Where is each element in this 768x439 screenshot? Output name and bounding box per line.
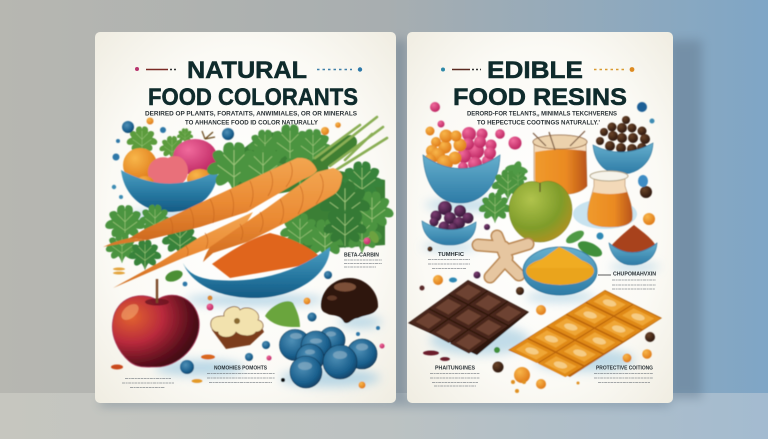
heading: natural food colorants: NATURAL: [187, 57, 307, 84]
scattered dots, right panel: [420, 102, 655, 393]
label: phaitungines: [430, 366, 480, 386]
apple slice: [211, 307, 264, 349]
subtitle: DERORD-FOR TELANTS,, MINIMALS TEKCHVERENS: [467, 110, 618, 118]
label: phaitungines: PHAITUNGINES: [435, 366, 476, 372]
label: nomohies pomohts: [207, 366, 275, 382]
label: beta-carbin: BETA-CARBIN: [344, 252, 379, 258]
title ornaments: [441, 67, 634, 72]
ginger root: [478, 236, 528, 277]
label: protective coitiong: [594, 366, 653, 382]
background floor: [0, 393, 768, 439]
title ornaments: [135, 67, 362, 72]
carrots: [103, 158, 342, 288]
subtitle: [145, 110, 358, 126]
label: nomohies pomohts: NOMOHIES POMOHTS: [214, 366, 268, 372]
dark chocolate bar: [408, 280, 529, 355]
apple: [112, 279, 199, 367]
carrot leaves: [105, 124, 394, 270]
heading: natural food colorants: [148, 57, 358, 111]
leaves around fruit bowl: [127, 126, 193, 160]
chocolate scoop: [321, 278, 378, 323]
green apple: [509, 181, 572, 242]
subtitle: TO HEPECTUCE COOTINGS NATURALLY.': [477, 120, 600, 126]
bowl of turmeric powder: [523, 247, 597, 295]
serving bowl with orange powder: [183, 233, 330, 298]
leaf near berries: [265, 301, 300, 327]
bowl of orange and pink berries: [423, 127, 500, 203]
panel shadow: [100, 40, 702, 406]
label: tumhfic: TUMHFIC: [438, 252, 464, 258]
label: beta-carbin: [344, 252, 382, 267]
leaves behind green apple: [479, 169, 527, 223]
scattered dots, left panel: [111, 118, 384, 388]
heading: edible food resins: FOOD RESINS: [453, 84, 627, 111]
fruit bowl: [121, 131, 218, 212]
heading: edible food resins: EDIBLE: [487, 57, 583, 84]
mint leaves: [504, 160, 604, 260]
bowl of red spice: [609, 225, 657, 265]
heading: natural food colorants: FOOD COLORANTS: [148, 84, 358, 111]
soft blue shadows: [130, 210, 382, 387]
caramel bar: [508, 290, 662, 377]
label: chupomahvxin with leader: CHUPOMAHVXIN: [613, 272, 656, 278]
label: tumhfic: [428, 252, 470, 268]
panel: natural food colorants: [95, 32, 396, 403]
subtitle: [467, 110, 618, 126]
heading: edible food resins: [453, 57, 627, 111]
blueberries: [280, 327, 377, 388]
plate with small jar: [573, 171, 637, 229]
panel: edible food resins: [407, 32, 673, 403]
subtitle: DERIRED OP PLANITS, FORATAITS, ANWIMIALES, OR OR MINERALS: [145, 110, 358, 118]
jar of amber resin: [533, 131, 587, 194]
bowl of purple berries: [422, 201, 476, 245]
subtitle: TO AHHANCEE FOOD ID COLOR NATURALLY: [185, 120, 319, 126]
label: chupomahvxin with leader: [598, 272, 656, 289]
carrot stems: [315, 117, 387, 170]
soft blue shadows: [422, 199, 660, 372]
bowl of chocolate pearls: [593, 116, 653, 174]
label: protective coitiong: PROTECTIVE COITIONG: [596, 366, 653, 372]
caption under apple: [122, 378, 174, 388]
